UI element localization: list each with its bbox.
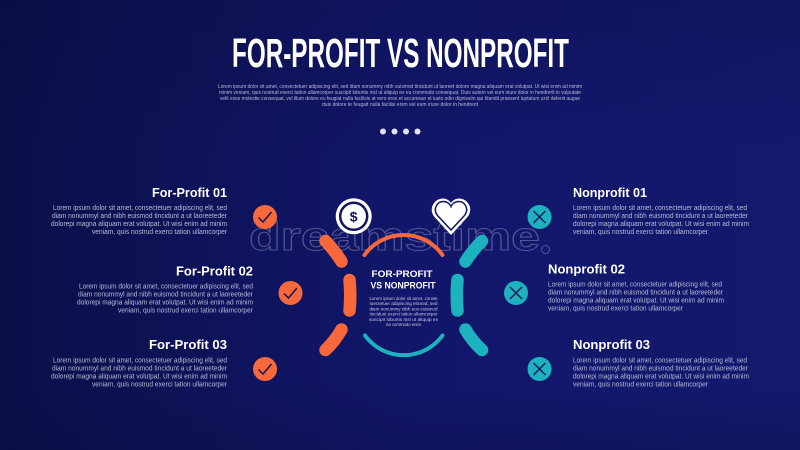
panel: Nonprofit 01: dolorepi magna aliquam erat volutpat. Ut wisi enim ad minim xyxy=(573,221,749,228)
center paragraph: diam nonummy nibh eos euismod xyxy=(370,306,438,311)
panel: Nonprofit 01: diam nonummyl and nibh euismod tincidunt a ut laoreeteder xyxy=(573,213,749,220)
intro paragraph: velit esse molestie consequat, vel illum dolore eu feugiat nulla facilisis at vero eros et accumsan et iusto odio dignissim qui blandit praesent luptatum zzril delenit augue xyxy=(220,96,580,102)
title: FOR-PROFIT VS NONPROFIT xyxy=(232,30,569,76)
panel: For-Profit 03: diam nonummyl and nibh euismod tincidunt a ut laoreeteder xyxy=(52,366,228,372)
panel: For-Profit 03: veniam, quis nostrud exerci tation ullamcorper xyxy=(92,382,228,388)
icon: dollar coin xyxy=(336,198,372,234)
panel: For-Profit 01: dolorepi magna aliquam erat volutpat. Ut wisi enim ad minim xyxy=(51,221,227,228)
panel: Nonprofit 03: diam nonummyl and nibh euismod tincidunt a ut laoreeteder xyxy=(573,366,749,372)
icon: check 1 xyxy=(253,205,277,229)
watermark: dreamstime xyxy=(249,215,540,259)
panel: For-Profit 02: veniam, quis nostrud exerci tation ullamcorper xyxy=(118,308,254,314)
panel: For-Profit 03: dolorepi magna aliquam erat volutpat. Ut wisi enim ad minim xyxy=(51,374,227,380)
icon: cross 3 xyxy=(528,357,552,381)
bottom arc xyxy=(365,336,442,355)
intro paragraph: Lorem ipsum dolor sit amet, consectetuer adipiscing elit, sed diam nonummy nibh euismod tincidunt ut laoreet dolore magna aliquam erat volutpat. Ut wisi enim ad minim xyxy=(218,84,582,90)
panel: For-Profit 03: For-Profit 03 xyxy=(149,337,227,352)
central diagram xyxy=(326,235,482,355)
center heading: VS NONPROFIT xyxy=(370,280,436,292)
panel: Nonprofit 02: dolorepi magna aliquam erat volutpat. Ut wisi enim ad minim xyxy=(548,298,724,304)
center paragraph: tincidunt exerci tation ullamcorper xyxy=(370,312,438,317)
panel: For-Profit 01: For-Profit 01 xyxy=(152,185,227,200)
panel: Nonprofit 02: Nonprofit 02 xyxy=(548,262,625,276)
panel: Nonprofit 01: Lorem ipsum dolor sit amet, consectetuer adipiscing elit, sed xyxy=(573,205,747,212)
panel: Nonprofit 02: veniam, quis nostrud exerci tation ullamcorper xyxy=(548,306,684,312)
pagination dots xyxy=(380,128,420,134)
center paragraph xyxy=(369,296,439,327)
panel: Nonprofit 03: Lorem ipsum dolor sit amet, consectetuer adipiscing elit, sed xyxy=(573,358,747,364)
panel: Nonprofit 01 xyxy=(573,185,749,236)
icon: heart xyxy=(432,198,470,235)
panel: For-Profit 01: Lorem ipsum dolor sit amet, consectetuer adipiscing elit, sed xyxy=(53,205,227,212)
icon: cross 1 xyxy=(528,205,552,229)
panel: For-Profit 02: For-Profit 02 xyxy=(176,264,253,278)
panel: Nonprofit 01: Nonprofit 01 xyxy=(573,185,647,200)
panel: Nonprofit 02: Lorem ipsum dolor sit amet, consectetuer adipiscing elit, sed xyxy=(548,282,722,288)
orange segments xyxy=(326,241,350,350)
center heading: FOR-PROFIT xyxy=(372,269,433,280)
center paragraph: ea commodo enim xyxy=(386,322,421,327)
panel: For-Profit 01: diam nonummyl and nibh euismod tincidunt a ut laoreeteder xyxy=(52,213,228,220)
panel: For-Profit 02: dolorepi magna aliquam erat volutpat. Ut wisi enim ad minim xyxy=(77,300,253,306)
panel: For-Profit 01 xyxy=(51,185,228,236)
panel: Nonprofit 03 xyxy=(573,337,749,388)
panel: For-Profit 01: veniam, quis nostrud exerci tation ullamcorper xyxy=(92,229,228,236)
panel: For-Profit 02: diam nonummyl and nibh euismod tincidunt a ut laoreeteder xyxy=(78,292,254,298)
panel: For-Profit 03: Lorem ipsum dolor sit amet, consectetuer adipiscing elit, sed xyxy=(53,358,227,364)
center heading xyxy=(370,269,436,292)
center paragraph: Lorem ipsum dolor sit amet, conste xyxy=(370,296,438,301)
panel: For-Profit 02 xyxy=(77,264,254,314)
panel: Nonprofit 02: diam nonummyl and nibh euismod tincidunt a ut laoreeteder xyxy=(548,290,724,296)
teal segments xyxy=(457,241,482,350)
center paragraph: suscipit lobortis nisl ut aliquip ex xyxy=(369,317,439,322)
panel: Nonprofit 03: dolorepi magna aliquam erat volutpat. Ut wisi enim ad minim xyxy=(573,374,749,380)
intro paragraph: minim veniam, quis nostrud exerci tation ullamcorper suscipit lobortis nisl ut aliquip ex ea commodo consequat. Duis autem vel eum iriure dolor in hendrerit in vulputate xyxy=(219,90,581,96)
panel: Nonprofit 03: Nonprofit 03 xyxy=(573,337,650,352)
center paragraph: tuectetuer adipiscing elicsed, sed xyxy=(370,301,438,306)
top arc xyxy=(364,235,442,255)
icon: check 2 xyxy=(278,281,302,305)
icon: check 3 xyxy=(253,357,277,381)
intro paragraph xyxy=(218,84,582,108)
panel: Nonprofit 01: veniam, quis nostrud exerci tation ullamcorper xyxy=(573,229,709,236)
panel: Nonprofit 02 xyxy=(548,262,724,312)
panel: Nonprofit 03: veniam, quis nostrud exerci tation ullamcorper xyxy=(573,382,709,388)
icon: cross 2 xyxy=(504,281,528,305)
panel: For-Profit 02: Lorem ipsum dolor sit amet, consectetuer adipiscing elit, sed xyxy=(79,284,253,290)
intro paragraph: duis dolore te feugait nulla facilisi enim vel eum iriure dolor in hendrerit xyxy=(322,102,479,108)
icon: dollar coin: $ xyxy=(350,208,358,224)
panel: For-Profit 03 xyxy=(51,337,228,388)
